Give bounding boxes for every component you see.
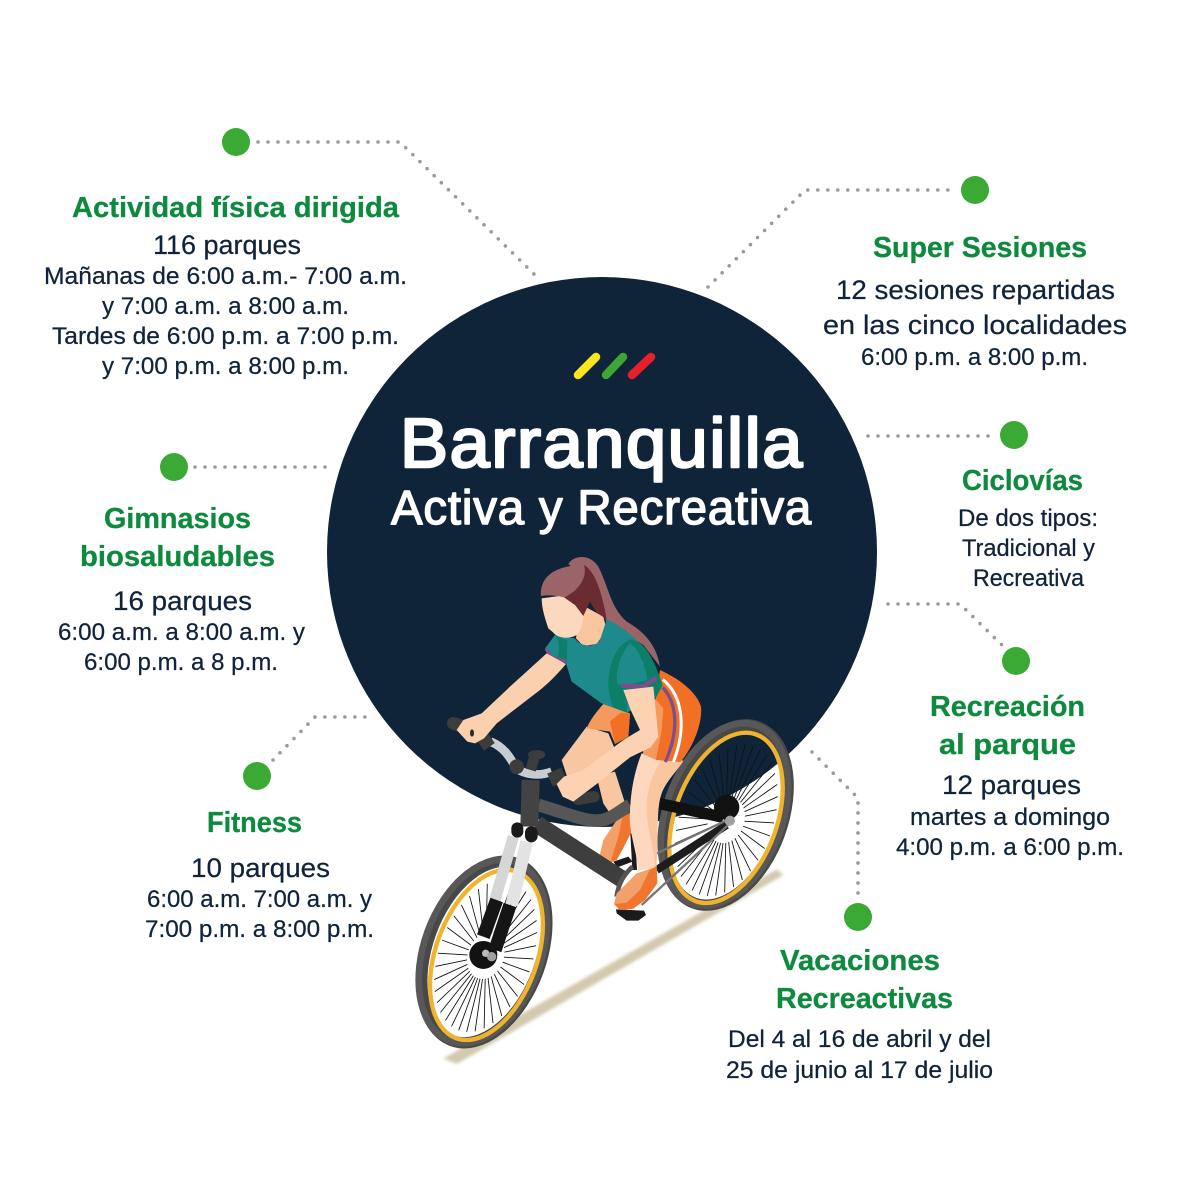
text block: Actividad física dirigida xyxy=(44,192,407,380)
text block: Ciclovías: Recreativa xyxy=(973,565,1085,592)
far shin and shoe xyxy=(597,772,634,867)
connector: Vacaciones Recreactivas xyxy=(812,752,872,931)
rear stays, chain and sprocket xyxy=(642,795,739,905)
text block: Gimnasios biosaludables: biosaludables xyxy=(80,541,275,573)
illustration: woman riding a bicycle xyxy=(395,557,812,1064)
icon: three colour stripes xyxy=(578,357,651,375)
text block: Gimnasios biosaludables: 6:00 a.m. a 8:00 a.m. y xyxy=(58,619,305,646)
title xyxy=(391,404,812,535)
text block: Actividad física dirigida: Tardes de 6:00 p.m. a 7:00 p.m. xyxy=(52,323,399,350)
central navy circle xyxy=(327,277,877,827)
text block: Gimnasios biosaludables: 6:00 p.m. a 8 p.m. xyxy=(84,649,278,676)
text block: Vacaciones Recreactivas xyxy=(726,945,993,1084)
text block: Gimnasios biosaludables xyxy=(58,503,305,676)
handlebar xyxy=(453,723,594,799)
t-shirt xyxy=(545,619,663,713)
title: Activa y Recreativa xyxy=(391,482,812,535)
text block: Super Sesiones: en las cinco localidades xyxy=(823,310,1127,340)
text block: Ciclovías: Tradicional y xyxy=(962,535,1095,562)
head and hair xyxy=(541,565,607,638)
text block: Gimnasios biosaludables: 16 parques xyxy=(113,586,252,616)
text block: Vacaciones Recreactivas: Recreactivas xyxy=(776,983,953,1015)
text block: Gimnasios biosaludables: Gimnasios xyxy=(104,503,251,535)
text block: Super Sesiones: 12 sesiones repartidas xyxy=(836,275,1115,305)
text block: Recreación al parque: 12 parques xyxy=(942,770,1081,800)
text block: Super Sesiones xyxy=(823,232,1127,371)
text block: Recreación al parque: al parque xyxy=(939,729,1076,761)
text block: Recreación al parque: 4:00 p.m. a 6:00 p.m. xyxy=(896,834,1124,861)
text block: Recreación al parque xyxy=(896,691,1124,861)
bike frame tubes xyxy=(529,780,635,880)
title: Barranquilla xyxy=(400,404,804,482)
text block: Super Sesiones: Super Sesiones xyxy=(873,232,1087,264)
text block: Fitness: 10 parques xyxy=(191,853,330,883)
text block: Ciclovías xyxy=(958,465,1098,592)
text block: Actividad física dirigida: Actividad física dirigida xyxy=(72,192,400,224)
text block: Fitness xyxy=(145,807,374,943)
connector: Fitness xyxy=(243,717,368,790)
text block: Actividad física dirigida: 116 parques xyxy=(153,230,301,260)
arms xyxy=(457,653,658,802)
text block: Recreación al parque: Recreación xyxy=(930,691,1085,723)
front wheel xyxy=(415,856,553,1048)
connector: Ciclovías xyxy=(868,421,1028,449)
connector: Gimnasios biosaludables xyxy=(160,453,327,481)
connector: Actividad física dirigida xyxy=(222,128,540,280)
text block: Vacaciones Recreactivas: Vacaciones xyxy=(780,945,940,977)
shorts xyxy=(587,670,701,762)
text block: Actividad física dirigida: Mañanas de 6:00 a.m.- 7:00 a.m. xyxy=(44,263,407,290)
text block: Super Sesiones: 6:00 p.m. a 8:00 p.m. xyxy=(861,344,1088,371)
far thigh xyxy=(562,727,617,781)
rear wheel xyxy=(658,719,794,911)
ground shadow xyxy=(443,869,783,1064)
text block: Fitness: 6:00 a.m. 7:00 a.m. y xyxy=(147,886,372,913)
text block: Vacaciones Recreactivas: 25 de junio al 17 de julio xyxy=(726,1057,993,1084)
ponytail and back hair xyxy=(568,557,660,667)
text block: Fitness: 7:00 p.m. a 8:00 p.m. xyxy=(145,916,374,943)
text block: Ciclovías: Ciclovías xyxy=(962,465,1083,497)
text block: Actividad física dirigida: y 7:00 a.m. a 8:00 a.m. xyxy=(102,293,349,320)
connector: Super Sesiones xyxy=(708,176,989,287)
neck xyxy=(576,607,607,646)
connector: Recreación al parque xyxy=(888,604,1030,675)
text block: Actividad física dirigida: y 7:00 p.m. a 8:00 p.m. xyxy=(102,353,349,380)
front fork and hub xyxy=(469,828,531,969)
text block: Recreación al parque: martes a domingo xyxy=(910,804,1110,831)
near leg and shoe xyxy=(614,753,683,910)
chainring and near pedal xyxy=(616,867,646,921)
text block: Ciclovías: De dos tipos: xyxy=(958,505,1098,532)
text block: Vacaciones Recreactivas: Del 4 al 16 de abril y del xyxy=(728,1026,991,1053)
text block: Fitness: Fitness xyxy=(207,807,302,839)
